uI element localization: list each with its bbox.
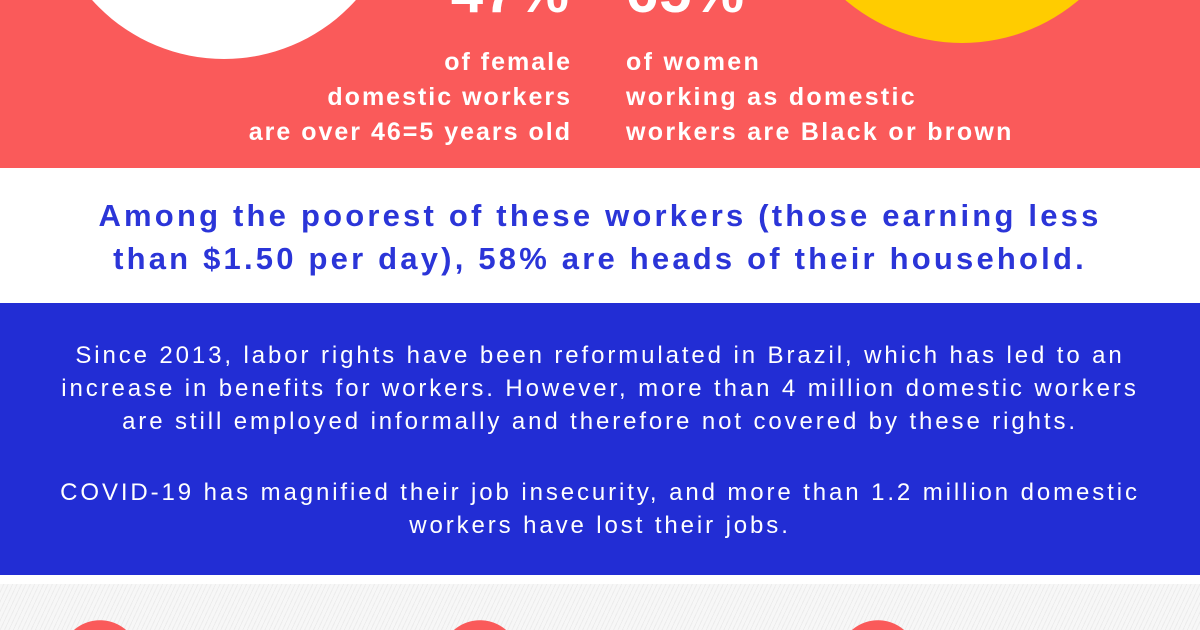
panel: striped bottom bbox=[0, 584, 1200, 630]
headline: poorest workers: than $1.50 per day), 58% are heads of their household. bbox=[113, 241, 1087, 276]
stat: 47% bbox=[249, 0, 572, 146]
headline: poorest workers bbox=[98, 198, 1102, 276]
icon: red circle 1 bbox=[60, 620, 140, 630]
icon: white circle bbox=[47, 0, 401, 59]
stat: 65% bbox=[626, 0, 1014, 146]
panel: blue text band bbox=[0, 303, 1200, 575]
text: labor rights: are still employed informally and therefore not covered by these rights. bbox=[122, 408, 1078, 435]
stat: 47%: domestic workers bbox=[327, 83, 572, 111]
icon: yellow circle bbox=[782, 0, 1142, 43]
stat: 65%: workers are Black or brown bbox=[626, 118, 1014, 146]
headline: poorest workers: Among the poorest of these workers (those earning less bbox=[98, 198, 1102, 233]
text: labor rights: Since 2013, labor rights have been reformulated in Brazil, which has led to an bbox=[75, 342, 1125, 369]
icon: red circle 2 bbox=[440, 620, 520, 630]
stat: 47%: are over 46=5 years old bbox=[249, 118, 572, 146]
stat: 65%: of women bbox=[626, 48, 761, 76]
text: covid: COVID-19 has magnified their job insecurity, and more than 1.2 million domestic bbox=[60, 479, 1140, 506]
stat: 65%: working as domestic bbox=[626, 83, 917, 111]
text: covid bbox=[60, 479, 1140, 539]
panel: top red stats band bbox=[0, 0, 1200, 168]
text: labor rights: increase in benefits for workers. However, more than 4 million domestic workers bbox=[61, 375, 1139, 402]
text: labor rights bbox=[61, 342, 1139, 435]
stat: 47%: of female bbox=[444, 48, 572, 76]
icon: red circle 3 bbox=[838, 620, 918, 630]
text: covid: workers have lost their jobs. bbox=[409, 512, 791, 539]
